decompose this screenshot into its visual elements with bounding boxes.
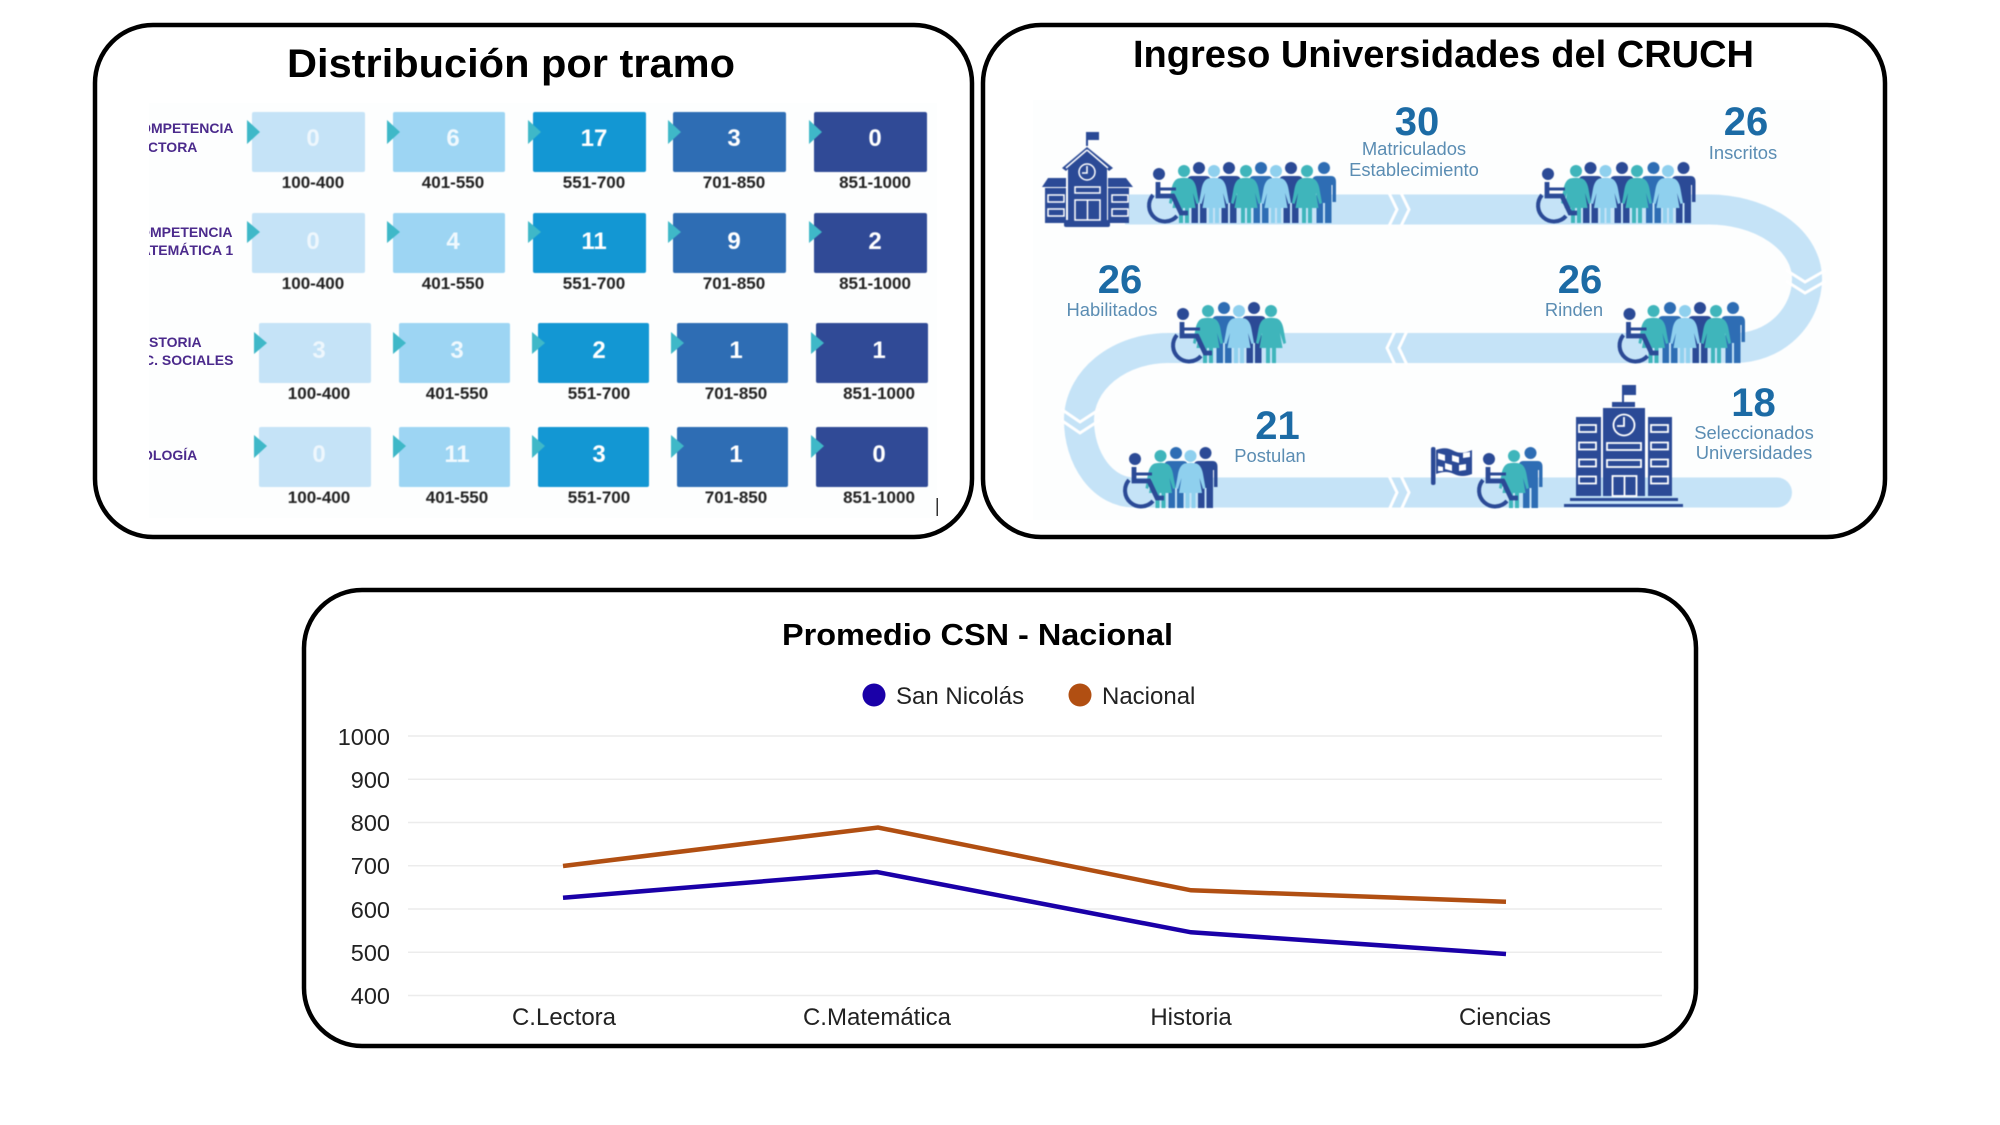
heading: Ingreso Universidades del CRUCH: Ingreso Universidades del CRUCH bbox=[1133, 34, 1754, 76]
x axis labels: C.Matemática bbox=[803, 1004, 952, 1031]
row: biología: 0 bbox=[312, 441, 326, 468]
row: competencia lectora: 6 bbox=[446, 125, 460, 152]
row: competencia matemática 1: 2 bbox=[868, 228, 882, 255]
stat: 26 habilitados bbox=[1067, 258, 1157, 320]
x axis labels: Historia bbox=[1150, 1004, 1232, 1031]
stat: 30 matriculados establecimiento bbox=[1349, 100, 1479, 180]
row: biología: 401-550 bbox=[426, 488, 488, 507]
x axis labels: Ciencias bbox=[1459, 1004, 1551, 1031]
stat: 26 rinden: 26 bbox=[1558, 258, 1602, 302]
row: historia y ciencias sociales: 2 bbox=[592, 337, 606, 364]
icon: school bbox=[1042, 132, 1133, 227]
stat: 18 seleccionados universidades: Universidades bbox=[1696, 442, 1812, 463]
heading: Promedio CSN - Nacional: Promedio CSN - Nacional bbox=[782, 617, 1173, 652]
row labels bbox=[149, 124, 234, 460]
row labels: BIOLOGÍA bbox=[128, 447, 197, 463]
stat: 21 postulan: 21 bbox=[1255, 404, 1300, 448]
row: competencia matemática 1: 401-550 bbox=[422, 274, 484, 293]
panel frame bbox=[304, 590, 1696, 1046]
row: biología bbox=[254, 427, 928, 507]
stat: 21 postulan: Postulan bbox=[1234, 445, 1306, 466]
stat: 26 inscritos bbox=[1709, 100, 1777, 163]
row: competencia matemática 1: 701-850 bbox=[703, 274, 765, 293]
image backdrop bbox=[1033, 100, 1830, 520]
row: biología: 1 bbox=[729, 441, 743, 468]
row: historia y ciencias sociales: 701-850 bbox=[705, 384, 767, 403]
row: competencia lectora: 100-400 bbox=[282, 173, 344, 192]
row: competencia matemática 1: 551-700 bbox=[563, 274, 625, 293]
icon: university building bbox=[1564, 385, 1683, 507]
people group: rinden bbox=[1620, 302, 1745, 363]
stat: 30 matriculados establecimiento: 30 bbox=[1395, 100, 1439, 144]
row: competencia lectora: 0 bbox=[868, 125, 882, 152]
stat: 18 seleccionados universidades: Seleccionados bbox=[1694, 422, 1814, 443]
row: biología: 701-850 bbox=[705, 488, 767, 507]
panel: distribución por tramo bbox=[95, 25, 972, 537]
row: historia y ciencias sociales: 1 bbox=[729, 337, 743, 364]
row: competencia lectora: 17 bbox=[581, 125, 607, 152]
series: San Nicolás bbox=[563, 872, 1506, 954]
row: competencia lectora: 3 bbox=[727, 125, 741, 152]
row: competencia lectora: 0 bbox=[306, 125, 320, 152]
row: competencia matemática 1: 851-1000 bbox=[839, 274, 911, 293]
row labels: MATEMÁTICA 1 bbox=[129, 242, 233, 258]
icon: checkered flag bbox=[1431, 447, 1472, 485]
row: competencia lectora: 401-550 bbox=[422, 173, 484, 192]
people group: seleccionados bbox=[1479, 447, 1542, 508]
row labels: COMPETENCIA bbox=[129, 224, 232, 240]
x axis labels: C.Lectora bbox=[512, 1004, 617, 1031]
stat: 21 postulan bbox=[1234, 404, 1306, 466]
stat: 26 habilitados: Habilitados bbox=[1067, 299, 1157, 320]
row: historia y ciencias sociales: 3 bbox=[312, 337, 326, 364]
stat: 26 rinden bbox=[1545, 258, 1603, 320]
row: biología: 11 bbox=[444, 441, 470, 468]
y axis labels bbox=[338, 724, 390, 1009]
row labels: COMPETENCIA bbox=[130, 120, 233, 136]
panel frame bbox=[95, 25, 972, 537]
stat: 18 seleccionados universidades: 18 bbox=[1731, 381, 1776, 425]
row labels: Y C. SOCIALES bbox=[131, 352, 233, 368]
row: competencia lectora: 551-700 bbox=[563, 173, 625, 192]
series: Nacional bbox=[563, 828, 1506, 902]
people group: postulan bbox=[1125, 447, 1218, 508]
row: competencia matemática 1: 11 bbox=[581, 228, 607, 255]
row labels: LECTORA bbox=[130, 139, 197, 155]
y axis labels: 1000 bbox=[338, 724, 390, 750]
stat: 18 seleccionados universidades bbox=[1694, 381, 1814, 463]
image backdrop bbox=[149, 103, 937, 518]
legend: Nacional bbox=[1102, 683, 1195, 710]
row: biología: 3 bbox=[592, 441, 606, 468]
row: historia y ciencias sociales: 851-1000 bbox=[843, 384, 915, 403]
panel: promedio CSN - nacional bbox=[304, 590, 1696, 1046]
stat: 26 inscritos: 26 bbox=[1724, 100, 1768, 144]
stat: 30 matriculados establecimiento: Matriculados bbox=[1362, 138, 1466, 159]
row: competencia matemática 1: 9 bbox=[727, 228, 741, 255]
legend: San Nicolás bbox=[896, 683, 1024, 710]
heading: Distribución por tramo: Distribución por tramo bbox=[287, 42, 735, 86]
stat: 26 inscritos: Inscritos bbox=[1709, 142, 1777, 163]
row: competencia matemática 1: 0 bbox=[306, 228, 320, 255]
row: biología: 0 bbox=[872, 441, 886, 468]
row: biología: 851-1000 bbox=[843, 488, 915, 507]
row: competencia lectora: 851-1000 bbox=[839, 173, 911, 192]
y axis labels: 400 bbox=[351, 983, 390, 1009]
row labels: HISTORIA bbox=[135, 334, 202, 350]
row: biología: 100-400 bbox=[288, 488, 350, 507]
y axis labels: 600 bbox=[351, 897, 390, 923]
row: competencia lectora: 701-850 bbox=[703, 173, 765, 192]
row: competencia matemática 1 bbox=[247, 213, 927, 293]
people group: inscritos bbox=[1538, 162, 1696, 223]
panel frame bbox=[983, 25, 1885, 537]
row: historia y ciencias sociales: 401-550 bbox=[426, 384, 488, 403]
row: historia y ciencias sociales bbox=[254, 323, 928, 403]
row: competencia matemática 1: 4 bbox=[446, 228, 460, 255]
stat: 30 matriculados establecimiento: Establecimiento bbox=[1349, 159, 1479, 180]
stat: 26 rinden: Rinden bbox=[1545, 299, 1603, 320]
row: historia y ciencias sociales: 1 bbox=[872, 337, 886, 364]
y axis labels: 800 bbox=[351, 810, 390, 836]
row: biología: 551-700 bbox=[568, 488, 630, 507]
people group: matriculados bbox=[1149, 162, 1336, 223]
row: competencia matemática 1: 100-400 bbox=[282, 274, 344, 293]
y axis labels: 900 bbox=[351, 767, 390, 793]
panel: ingreso universidades del CRUCH bbox=[983, 25, 1885, 537]
row: competencia lectora bbox=[247, 112, 927, 192]
row: historia y ciencias sociales: 551-700 bbox=[568, 384, 630, 403]
row: historia y ciencias sociales: 100-400 bbox=[288, 384, 350, 403]
winding road bbox=[1061, 193, 1826, 510]
x axis labels bbox=[512, 1004, 1551, 1031]
stat: 26 habilitados: 26 bbox=[1098, 258, 1142, 302]
row: historia y ciencias sociales: 3 bbox=[450, 337, 464, 364]
people group: habilitados bbox=[1173, 302, 1286, 363]
legend bbox=[862, 683, 1195, 710]
y axis labels: 700 bbox=[351, 853, 390, 879]
line chart bbox=[338, 724, 1662, 1031]
y axis labels: 500 bbox=[351, 940, 390, 966]
